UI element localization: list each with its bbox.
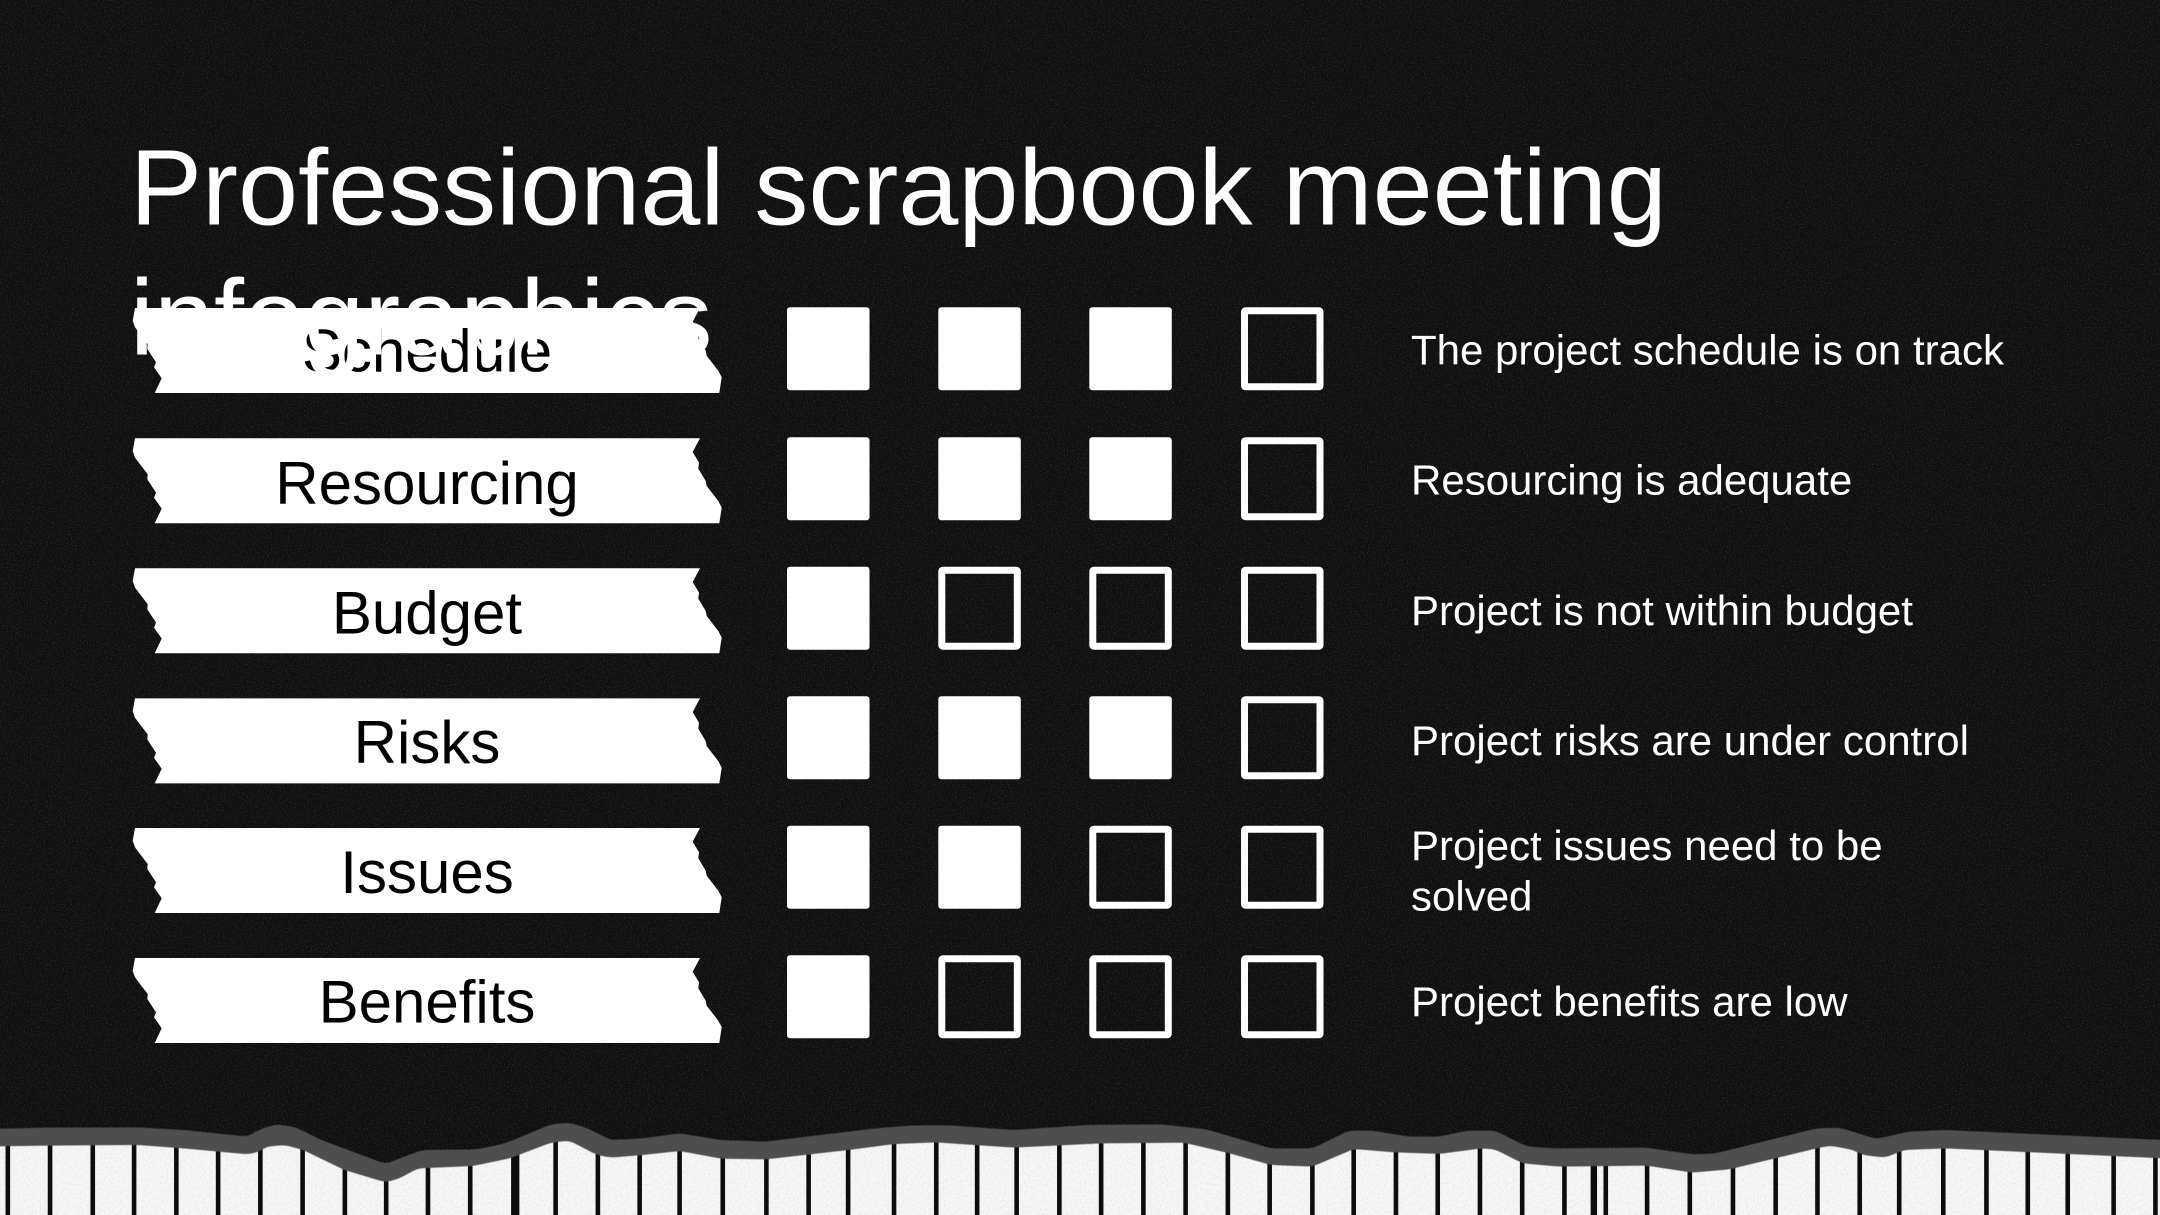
label: Resourcing: Resourcing	[275, 450, 579, 517]
torn paper strip	[0, 1122, 2160, 1215]
tape: Schedule	[133, 308, 722, 393]
rating squares: Risks	[787, 696, 1320, 779]
description: Budget: Project is not within budget	[1411, 587, 1913, 634]
title: Professional scrapbook meeting	[130, 127, 1667, 248]
description: Risks: Project risks are under control	[1411, 717, 1969, 764]
paper sheet	[0, 1137, 2160, 1215]
grey torn edge	[0, 1123, 2160, 1182]
rating squares: Resourcing	[787, 437, 1320, 520]
label: Schedule: Schedule	[302, 318, 552, 384]
tape: Resourcing	[133, 438, 722, 523]
row: Issues	[133, 822, 1883, 919]
description: Issues: solved	[1411, 872, 1532, 919]
row: Schedule	[133, 307, 2005, 393]
description: Resourcing: Resourcing is adequate	[1411, 456, 1852, 503]
title: infographics	[130, 257, 712, 378]
rating squares: Benefits	[787, 955, 1320, 1038]
rating squares: Budget	[787, 567, 1320, 650]
description: Schedule: The project schedule is on track	[1411, 327, 2005, 374]
tape: Risks	[133, 698, 722, 783]
description: Benefits: Project benefits are low	[1411, 978, 1848, 1025]
label: Benefits: Benefits	[319, 969, 535, 1036]
tape: Budget	[133, 568, 722, 653]
tape: Issues	[133, 828, 722, 913]
row: Risks	[133, 696, 1969, 783]
row: Benefits	[133, 955, 1848, 1043]
label: Issues: Issues	[340, 839, 514, 906]
vertical stripes	[6, 1141, 2158, 1215]
tape: Benefits	[133, 958, 722, 1043]
row: Resourcing	[133, 437, 1852, 523]
rating squares: Issues	[787, 826, 1320, 909]
row: Budget	[133, 567, 1913, 653]
label: Budget: Budget	[332, 580, 522, 646]
rating squares: Schedule	[787, 307, 1320, 390]
description: Issues: Project issues need to be	[1411, 822, 1883, 869]
label: Risks: Risks	[354, 709, 500, 776]
